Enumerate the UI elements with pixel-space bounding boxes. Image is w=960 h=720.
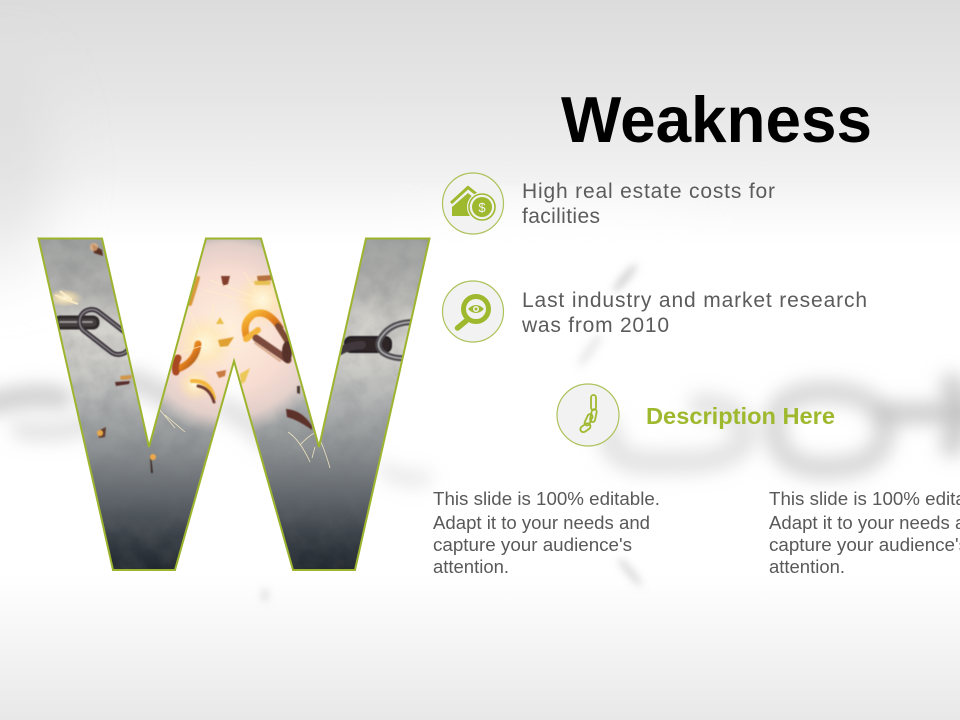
point 2: icon magnifier with eye — [442, 281, 504, 342]
point 2: text — [521, 289, 867, 337]
point 2: text: was from 2010 — [521, 314, 669, 337]
right chain — [338, 322, 414, 358]
text block left: Adapt it to your needs and — [433, 513, 650, 533]
big letter W with broken chain photo — [30, 225, 440, 580]
W outline — [38, 238, 430, 570]
text block right, running off the slide: attention. — [769, 557, 845, 577]
white flares — [52, 278, 280, 398]
left chain — [57, 306, 127, 358]
point 1: text — [522, 180, 775, 228]
title: Weakness — [561, 83, 872, 156]
text block left: capture your audience's — [433, 535, 632, 555]
description icon: chain — [557, 384, 619, 446]
broken glowing links — [175, 278, 292, 402]
point 1: text: facilities — [522, 205, 600, 228]
text block right, running off the slide — [769, 489, 960, 577]
text block left: attention. — [433, 557, 509, 577]
sparks and fragments — [90, 243, 312, 473]
description heading: Description Here — [646, 403, 835, 429]
point 1: icon house and coin: $ — [478, 200, 486, 215]
text block left — [433, 489, 660, 577]
text block left: This slide is 100% editable. — [433, 489, 660, 509]
text block right, running off the slide: capture your audience's — [769, 535, 960, 555]
point 2: text: Last industry and market research — [522, 289, 867, 312]
point 1: icon house and coin — [442, 173, 504, 234]
point 1: text: High real estate costs for — [522, 180, 775, 203]
